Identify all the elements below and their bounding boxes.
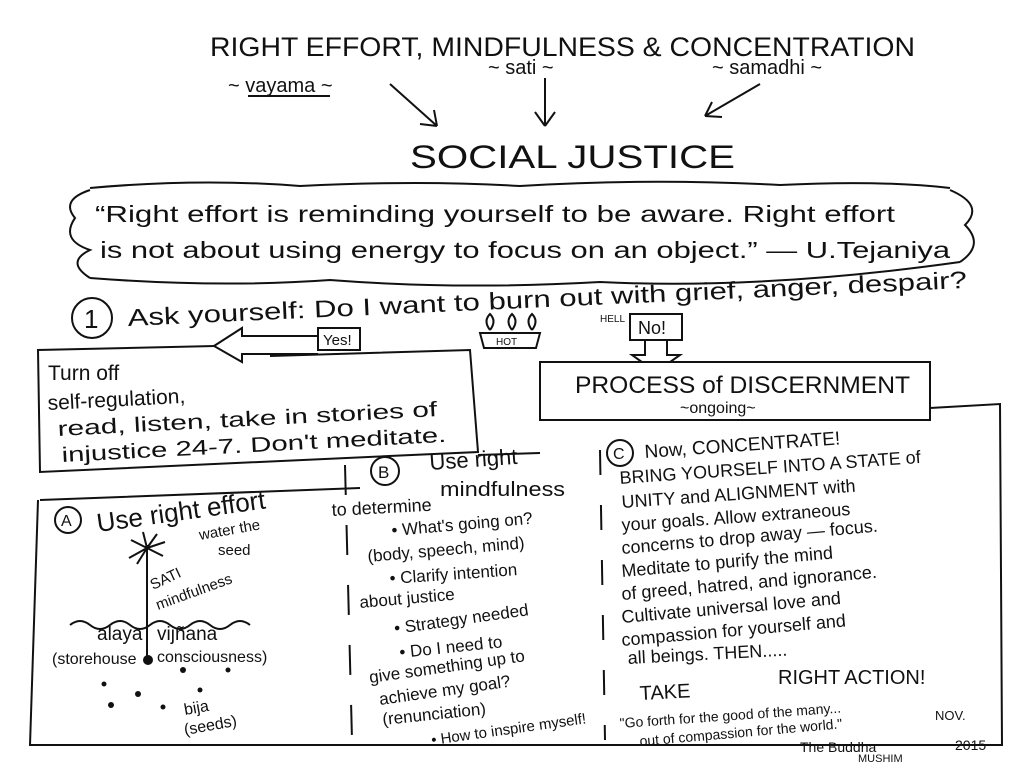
panel A: right effort: water the xyxy=(197,516,261,544)
panel: turn off: injustice 24-7. Don't meditate. xyxy=(61,424,447,467)
panel A: right effort: seed xyxy=(218,542,251,559)
panel B: right mindfulness: achieve my goal? xyxy=(378,672,512,709)
panel C: concentrate: BRING YOURSELF INTO A STATE of xyxy=(619,447,922,488)
panel A: right effort: A xyxy=(61,513,72,530)
panel A: right effort: vijñana xyxy=(157,624,218,645)
panel A: right effort: (storehouse xyxy=(52,651,137,668)
panel: turn off: self-regulation, xyxy=(47,385,186,415)
panel: turn off: read, listen, take in stories of xyxy=(57,398,438,441)
panel C: concentrate: UNITY and ALIGNMENT with xyxy=(621,476,856,512)
icon: hot flames xyxy=(480,314,540,348)
title: RIGHT EFFORT, MINDFULNESS & CONCENTRATION xyxy=(210,32,915,62)
panel B: right mindfulness: (body, speech, mind) xyxy=(367,533,525,566)
panel A: right effort: alaya xyxy=(97,624,143,645)
process of discernment box: ~ongoing~ xyxy=(680,400,756,417)
quote cloud xyxy=(70,182,974,286)
panel B: right mindfulness: • Do I need to xyxy=(398,632,503,662)
panel C: concentrate: your goals. Allow extraneous xyxy=(621,499,851,535)
panel B: right mindfulness: mindfulness xyxy=(440,479,565,501)
panel B: right mindfulness: • Strategy needed xyxy=(393,600,530,638)
panel B: right mindfulness: • What's going on? xyxy=(391,509,533,540)
panel C: concentrate: concerns to drop away — focus. xyxy=(621,516,878,558)
panel C: concentrate: RIGHT ACTION! xyxy=(778,667,925,689)
panel C: concentrate: all beings. THEN..... xyxy=(627,640,788,668)
panel B: right mindfulness: B xyxy=(378,463,389,482)
panel B: right mindfulness: (renunciation) xyxy=(381,699,487,729)
panel C: concentrate: of greed, hatred, and ignorance. xyxy=(621,562,878,604)
panel C: concentrate: Cultivate universal love and xyxy=(621,588,842,627)
panel C: concentrate: TAKE xyxy=(639,680,691,705)
process of discernment box xyxy=(540,362,930,420)
process of discernment box: PROCESS of DISCERNMENT xyxy=(575,372,910,399)
step 1 question: 1 xyxy=(84,304,98,334)
panel C: concentrate xyxy=(607,428,925,755)
panel B: right mindfulness xyxy=(331,444,587,749)
panel A: right effort: mindfulness xyxy=(154,570,235,614)
panel A: right effort: (seeds) xyxy=(183,713,238,739)
panel B: right mindfulness: give something up to xyxy=(368,646,526,687)
no arrow: No! xyxy=(638,318,666,338)
yes arrow xyxy=(214,328,360,362)
panel C: concentrate: C xyxy=(613,446,625,463)
panel C: concentrate: compassion for yourself and xyxy=(621,610,847,650)
panel C: concentrate: Meditate to purify the mind xyxy=(621,543,834,581)
no arrow: HELL xyxy=(600,314,625,325)
panel B: right mindfulness: to determine xyxy=(331,495,432,520)
panel A: right effort: Use right effort xyxy=(95,484,268,538)
signature and date: NOV. xyxy=(935,708,966,723)
no arrow xyxy=(600,314,682,372)
step 1 question: Ask yourself: Do I want to burn out with grief, anger, despair? xyxy=(127,267,967,332)
arrows to social justice xyxy=(390,78,760,126)
icon: palm tree xyxy=(70,532,250,664)
panel B: right mindfulness: Use right xyxy=(429,444,518,475)
panel B: right mindfulness: about justice xyxy=(359,585,455,612)
panel C: concentrate: Now, CONCENTRATE! xyxy=(644,428,841,463)
heading: social justice: SOCIAL JUSTICE xyxy=(410,139,735,175)
step 1 question xyxy=(72,267,967,338)
panel C: concentrate: The Buddha xyxy=(800,739,876,755)
quote cloud: is not about using energy to focus on an object.” — U.Tejaniya xyxy=(100,237,950,263)
panel A: right effort: SATI xyxy=(148,565,184,594)
signature and date: 2015 xyxy=(955,737,986,753)
yes arrow: Yes! xyxy=(323,332,352,349)
panel A: right effort xyxy=(52,484,268,739)
panel B: right mindfulness: • Clarify intention xyxy=(389,560,518,588)
panel C: concentrate: out of compassion for the world." xyxy=(639,715,843,749)
subtitle: samadhi: ~ samadhi ~ xyxy=(712,57,822,79)
icon: hot flames: HOT xyxy=(496,337,517,348)
main panel frame xyxy=(30,404,1002,745)
subtitle: sati: ~ sati ~ xyxy=(488,57,554,79)
panel A: right effort: bija xyxy=(183,698,210,719)
panel: turn off: Turn off xyxy=(48,362,119,385)
signature and date: MUSHIM xyxy=(858,753,903,765)
quote cloud: “Right effort is reminding yourself to be aware. Right effort xyxy=(95,201,896,227)
subtitle: vayama: ~ vayama ~ xyxy=(228,75,333,97)
panel C: concentrate: "Go forth for the good of the many... xyxy=(619,700,842,731)
panel A: right effort: consciousness) xyxy=(157,649,267,666)
panel B: right mindfulness: • How to inspire myself! xyxy=(430,710,587,749)
panel: turn off xyxy=(38,346,478,472)
signature and date xyxy=(858,708,986,765)
